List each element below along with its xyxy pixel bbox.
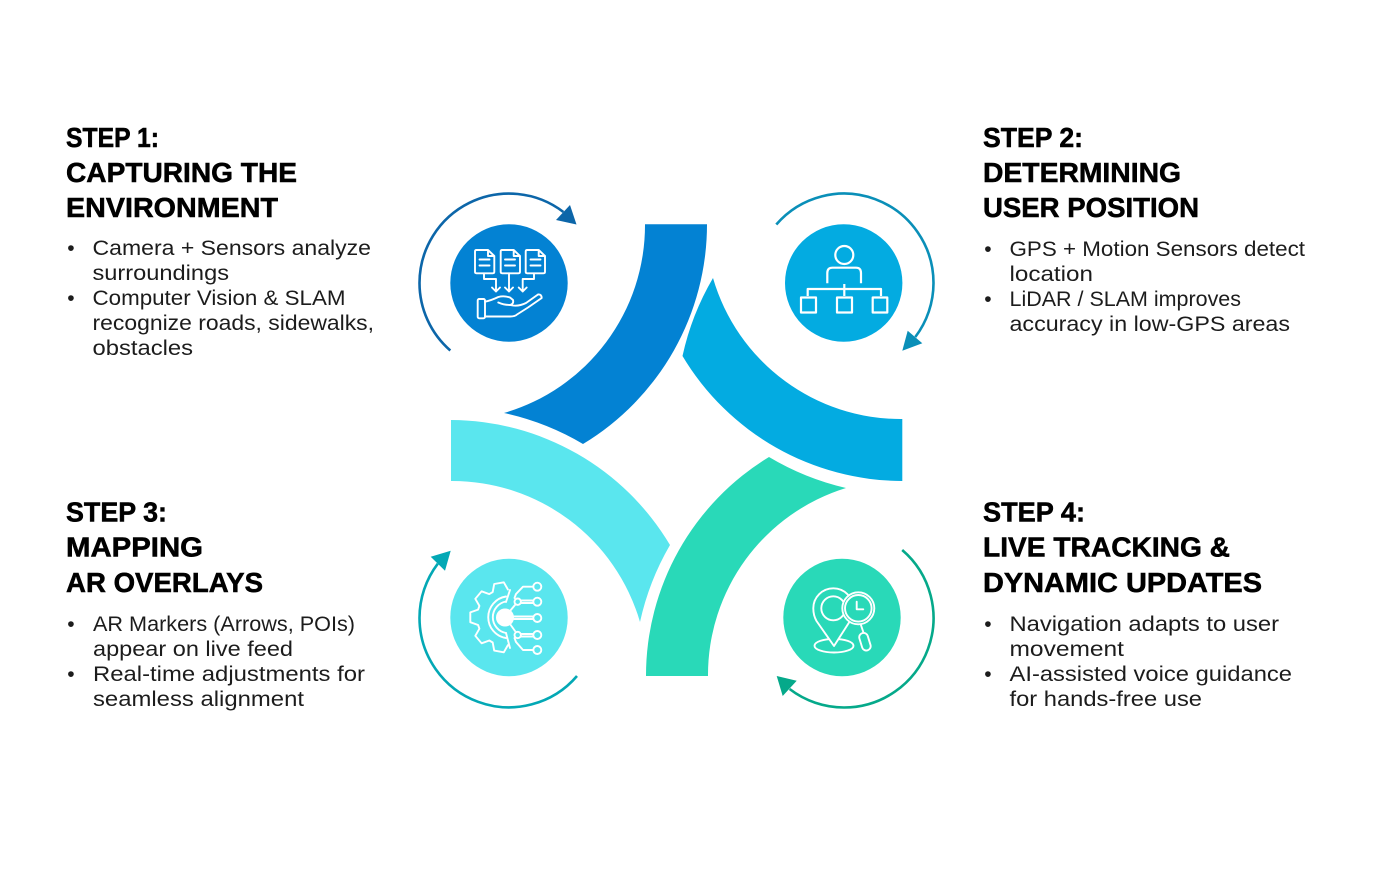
bullet list: step 3: seamless alignment bbox=[93, 688, 304, 711]
bullet list: step 2: • bbox=[984, 288, 992, 311]
arrow: step 4 circular bbox=[777, 550, 934, 708]
bullet list: step 4: • bbox=[984, 663, 992, 686]
bullet list: step 4: • bbox=[984, 613, 992, 636]
bullet list: step 2: LiDAR / SLAM improves bbox=[1010, 288, 1241, 311]
bullet list: step 2: accuracy in low-GPS areas bbox=[1010, 313, 1290, 336]
bullet list: step 1: obstacles bbox=[92, 337, 193, 360]
bullet list: step 1: surroundings bbox=[92, 262, 229, 285]
arrow: step 1 circular bbox=[420, 194, 576, 350]
bullet list: step 3: • bbox=[67, 663, 75, 686]
heading: step 2: STEP 2: bbox=[983, 122, 1083, 153]
bullet list: step 4 bbox=[984, 613, 1292, 711]
segment: step 4 green bbox=[646, 457, 846, 676]
bullet list: step 1: Camera + Sensors analyze bbox=[92, 237, 371, 260]
bullet list: step 3: appear on live feed bbox=[93, 638, 293, 661]
segment: step 3 cyan bbox=[451, 420, 670, 622]
heading: step 2: USER POSITION bbox=[983, 192, 1199, 223]
bullet list: step 3: AR Markers (Arrows, POIs) bbox=[93, 613, 355, 636]
bullet list: step 1: • bbox=[67, 287, 75, 310]
bullet list: step 1: Computer Vision & SLAM bbox=[92, 287, 346, 310]
heading: step 2: DETERMINING bbox=[983, 157, 1181, 188]
bullet list: step 2: location bbox=[1010, 263, 1093, 286]
bullet list: step 3: • bbox=[67, 613, 75, 636]
bullet list: step 4: movement bbox=[1010, 638, 1124, 661]
bullet list: step 1: • bbox=[67, 237, 75, 260]
segment: step 1 blue bbox=[504, 224, 707, 444]
bullet list: step 4: AI-assisted voice guidance bbox=[1010, 663, 1292, 686]
heading: step 3: STEP 3: bbox=[66, 496, 167, 528]
bullet list: step 1: recognize roads, sidewalks, bbox=[92, 312, 374, 335]
heading: step 2 bbox=[983, 122, 1199, 223]
bullet list: step 4: for hands-free use bbox=[1010, 688, 1202, 711]
heading: step 1 bbox=[66, 122, 297, 223]
heading: step 4: STEP 4: bbox=[983, 496, 1085, 528]
bullet list: step 3: Real-time adjustments for bbox=[93, 663, 365, 686]
panel: step 2 text bbox=[983, 122, 1305, 336]
heading: step 4: DYNAMIC UPDATES bbox=[983, 567, 1262, 598]
icon: gear with circuit bbox=[450, 559, 568, 676]
heading: step 1: ENVIRONMENT bbox=[66, 192, 278, 223]
segment: step 2 sky blue bbox=[682, 278, 902, 481]
panel: step 3 text bbox=[66, 496, 365, 711]
icon: documents into hand bbox=[450, 224, 568, 342]
heading: step 4 bbox=[983, 496, 1262, 598]
bullet list: step 3 bbox=[67, 613, 365, 711]
heading: step 3: AR OVERLAYS bbox=[66, 567, 263, 598]
heading: step 4: LIVE TRACKING & bbox=[983, 532, 1230, 562]
heading: step 1: STEP 1: bbox=[66, 122, 159, 153]
icon: location pin with magnifier and clock bbox=[783, 559, 901, 676]
bullet list: step 2: • bbox=[984, 238, 992, 261]
bullet list: step 4: Navigation adapts to user bbox=[1010, 613, 1279, 636]
bullet list: step 1 bbox=[67, 237, 374, 360]
bullet list: step 2: GPS + Motion Sensors detect bbox=[1010, 238, 1305, 261]
heading: step 3 bbox=[66, 496, 263, 598]
arrow: step 3 circular bbox=[419, 551, 577, 707]
heading: step 3: MAPPING bbox=[66, 532, 203, 562]
bullet list: step 2 bbox=[984, 238, 1305, 336]
arrow: step 2 circular bbox=[776, 194, 934, 351]
icon: org hierarchy user bbox=[785, 224, 902, 342]
central diagram: four curved segments bbox=[451, 224, 902, 676]
panel: step 1 text bbox=[66, 122, 374, 360]
heading: step 1: CAPTURING THE bbox=[66, 157, 297, 188]
panel: step 4 text bbox=[983, 496, 1292, 711]
